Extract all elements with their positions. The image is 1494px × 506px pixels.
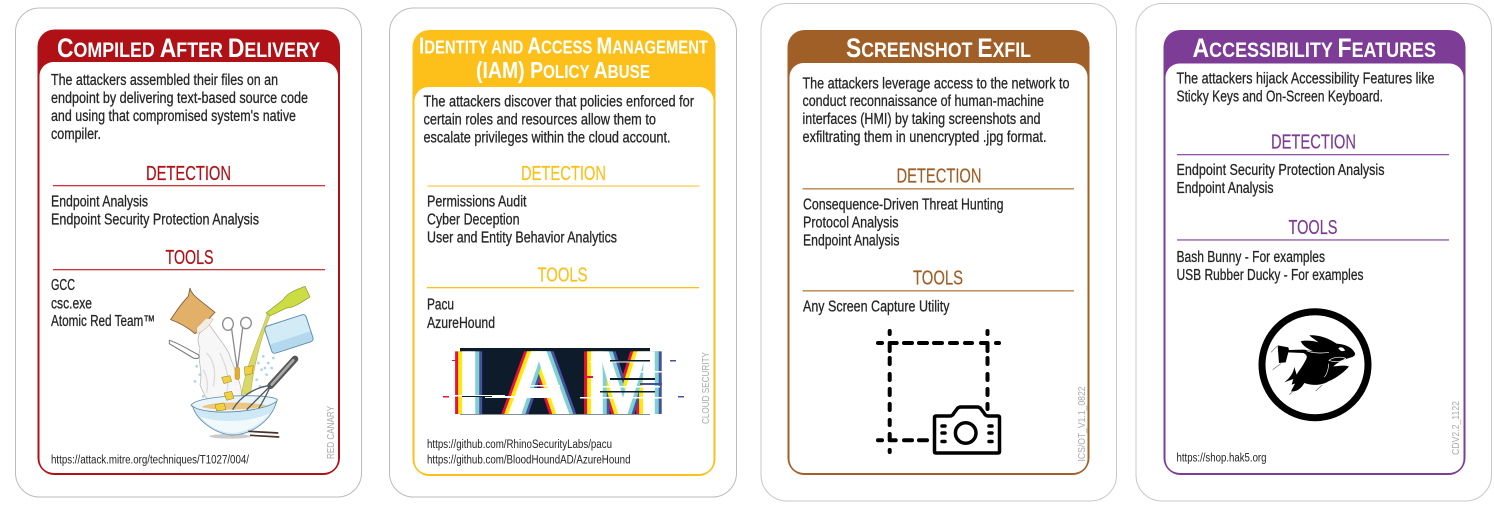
detection list: Cyber Deception <box>427 212 520 228</box>
description <box>424 94 694 146</box>
tools list: GCC <box>51 277 75 294</box>
detection list: Endpoint Analysis <box>1176 180 1274 197</box>
icon: glitched IAM graphic: IAM <box>452 333 657 434</box>
URLs: https://github.com/BloodHoundAD/AzureHound <box>427 454 630 466</box>
description: The attackers leverage access to the network to <box>802 76 1070 92</box>
detection list: Protocol Analysis <box>803 214 899 232</box>
icon: glitched IAM graphic <box>443 348 684 414</box>
detection list: Endpoint Security Protection Analysis <box>1176 162 1385 179</box>
icon: glitched IAM graphic: IAM <box>460 333 665 434</box>
URL: https://attack.mitre.org/techniques/T1027/004/ <box>51 454 250 466</box>
title: ACCESSIBILITY FEATURES <box>1192 33 1436 63</box>
description: and using that compromised system's native <box>51 108 296 125</box>
tools list: Atomic Red Team™ <box>51 313 155 330</box>
tools list: Pacu <box>427 296 454 314</box>
title <box>419 32 708 83</box>
description: Sticky Keys and On-Screen Keyboard. <box>1176 88 1383 106</box>
detection list: User and Entity Behavior Analytics <box>427 230 617 246</box>
detection heading: DETECTION <box>896 166 982 188</box>
icon: running rabbit with hammer logo <box>1262 312 1368 418</box>
description: certain roles and resources allow them to <box>424 112 656 128</box>
detection list: Endpoint Analysis <box>803 232 900 250</box>
tools list: Bash Bunny - For examples <box>1176 249 1325 266</box>
panel: Compiled After Delivery card <box>16 8 362 497</box>
detection list <box>1176 162 1385 197</box>
tools heading: TOOLS <box>913 268 963 290</box>
description <box>1176 70 1434 106</box>
description: The attackers assembled their files on an <box>51 72 278 89</box>
description <box>51 72 308 143</box>
URLs: https://github.com/RhinoSecurityLabs/pacu <box>427 439 612 451</box>
tools heading: TOOLS <box>166 247 214 269</box>
panel: Accessibility Features card <box>1136 4 1492 501</box>
tools list: USB Rubber Ducky - For examples <box>1176 267 1364 284</box>
detection heading: DETECTION <box>521 163 606 185</box>
panel: Identity and Access Management card <box>390 8 736 497</box>
version tag: CDV2.2_1122 <box>1450 401 1462 455</box>
detection heading: DETECTION <box>1271 132 1356 154</box>
detection list <box>51 194 259 228</box>
description: The attackers discover that policies enforced for <box>424 94 694 110</box>
version tag: RED CANARY <box>325 406 337 459</box>
detection heading: DETECTION <box>146 163 231 185</box>
tools list: AzureHound <box>427 315 495 332</box>
description: The attackers hijack Accessibility Features like <box>1176 70 1434 88</box>
description: compiler. <box>51 126 101 143</box>
URL: https://shop.hak5.org <box>1176 452 1266 464</box>
tools heading: TOOLS <box>538 264 588 286</box>
version tag: CLOUD SECURITY <box>700 352 712 424</box>
icon: glitched IAM graphic: IAM <box>463 333 668 434</box>
tools list: csc.exe <box>51 296 92 312</box>
description: escalate privileges within the cloud account. <box>424 130 670 146</box>
description: endpoint by delivering text-based source code <box>51 90 308 107</box>
icon: screen capture selection with camera <box>878 331 1000 453</box>
title: (IAM) POLICY ABUSE <box>476 57 650 83</box>
title: SCREENSHOT EXFIL <box>846 33 1031 63</box>
title: COMPILED AFTER DELIVERY <box>57 33 320 63</box>
illustration: ingredients pouring into mixing bowl <box>169 286 314 439</box>
detection list: Consequence-Driven Threat Hunting <box>803 196 1004 214</box>
URLs <box>427 439 630 466</box>
version tag: ICS/OT_V1.1_0822 <box>1076 386 1088 462</box>
tools list <box>51 277 155 330</box>
tools heading: TOOLS <box>1288 217 1338 239</box>
description: conduct reconnaissance of human-machine <box>802 93 1044 110</box>
icon: glitched IAM graphic: IAM <box>456 333 661 434</box>
detection list: Endpoint Security Protection Analysis <box>51 212 259 228</box>
detection list <box>803 196 1004 250</box>
detection list <box>427 194 617 246</box>
icon: glitched IAM graphic: IAM <box>449 333 654 434</box>
tools list: Any Screen Capture Utility <box>803 298 950 316</box>
detection list: Endpoint Analysis <box>51 194 148 210</box>
detection list: Permissions Audit <box>427 194 527 210</box>
panel: Screenshot Exfil card <box>761 4 1116 501</box>
description: interfaces (HMI) by taking screenshots and <box>802 111 1040 128</box>
description: exfiltrating them in unencrypted .jpg format. <box>802 129 1046 146</box>
title: IDENTITY AND ACCESS MANAGEMENT <box>419 32 708 58</box>
tools list <box>1176 249 1364 284</box>
tools list <box>427 296 495 332</box>
description <box>802 76 1070 146</box>
